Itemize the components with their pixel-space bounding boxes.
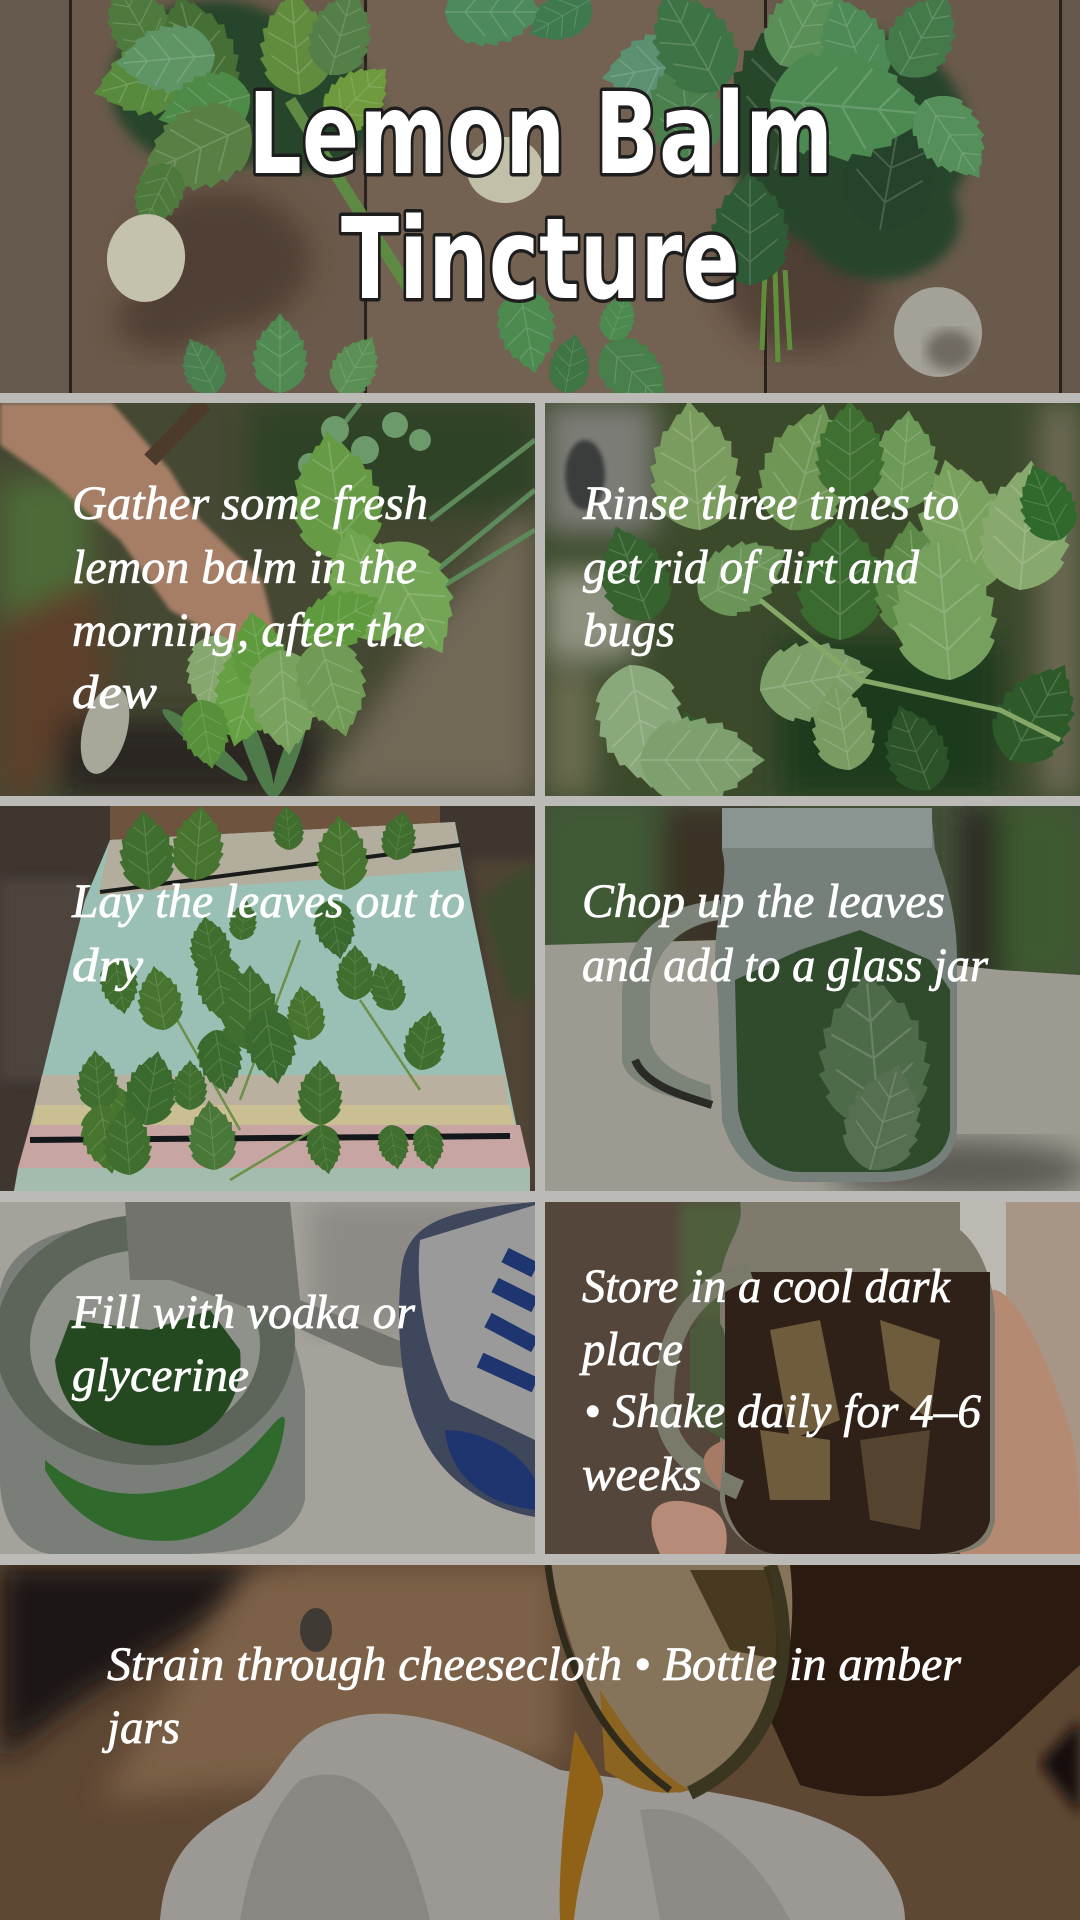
step text: • Shake daily for 4–6 — [584, 1385, 981, 1438]
title text — [248, 70, 833, 325]
panel: title header — [0, 0, 1080, 393]
photo: glass jar of chopped leaves — [545, 806, 1080, 1200]
photo: pouring liquid from pitcher into jar — [0, 1202, 535, 1554]
step text: glycerine — [72, 1349, 249, 1402]
step text: and add to a glass jar — [582, 939, 988, 992]
step text: weeks — [582, 1448, 702, 1501]
title text: Lemon Balm — [248, 70, 833, 200]
step text: Strain through cheesecloth • Bottle in amber — [107, 1638, 961, 1691]
panel: step 1 gather — [0, 403, 535, 796]
step text: dew — [72, 666, 157, 719]
step text — [71, 875, 465, 992]
title text: Tincture — [341, 195, 740, 325]
step text: place — [579, 1323, 683, 1376]
step text — [579, 1260, 981, 1501]
photo: hand holding jar of steeping leaves — [545, 1202, 1080, 1554]
step text — [72, 477, 428, 719]
step text — [582, 875, 988, 992]
step text: get rid of dirt and — [583, 541, 920, 594]
step text: bugs — [583, 604, 675, 657]
photo: leaves in water bowl — [545, 393, 1080, 804]
photo: straining tincture through cheesecloth — [0, 1565, 1080, 1920]
photo: wood planks with lemon balm bunches and stones — [0, 0, 1080, 426]
step text: Gather some fresh — [72, 477, 428, 530]
panel: step 7 strain — [0, 1565, 1080, 1920]
step text — [101, 1638, 961, 1754]
step text: morning, after the — [72, 604, 425, 657]
step text: Fill with vodka or — [71, 1286, 415, 1339]
panel: step 2 rinse — [545, 403, 1080, 796]
panel: step 3 dry — [0, 806, 535, 1191]
step text: Store in a cool dark — [582, 1260, 952, 1313]
step text: jars — [101, 1701, 180, 1754]
step text: Lay the leaves out to — [71, 875, 465, 928]
photo: leaves drying on towel — [0, 803, 535, 1191]
step text: dry — [72, 939, 144, 992]
step text — [71, 1286, 415, 1402]
photo: hand picking lemon balm — [0, 403, 535, 800]
panel: step 6 store — [545, 1202, 1080, 1554]
step text — [582, 477, 959, 657]
step text: Rinse three times to — [582, 477, 959, 530]
step text: Chop up the leaves — [582, 875, 945, 928]
panel: step 5 fill — [0, 1202, 535, 1554]
panel: step 4 chop — [545, 806, 1080, 1191]
step text: lemon balm in the — [72, 541, 417, 594]
